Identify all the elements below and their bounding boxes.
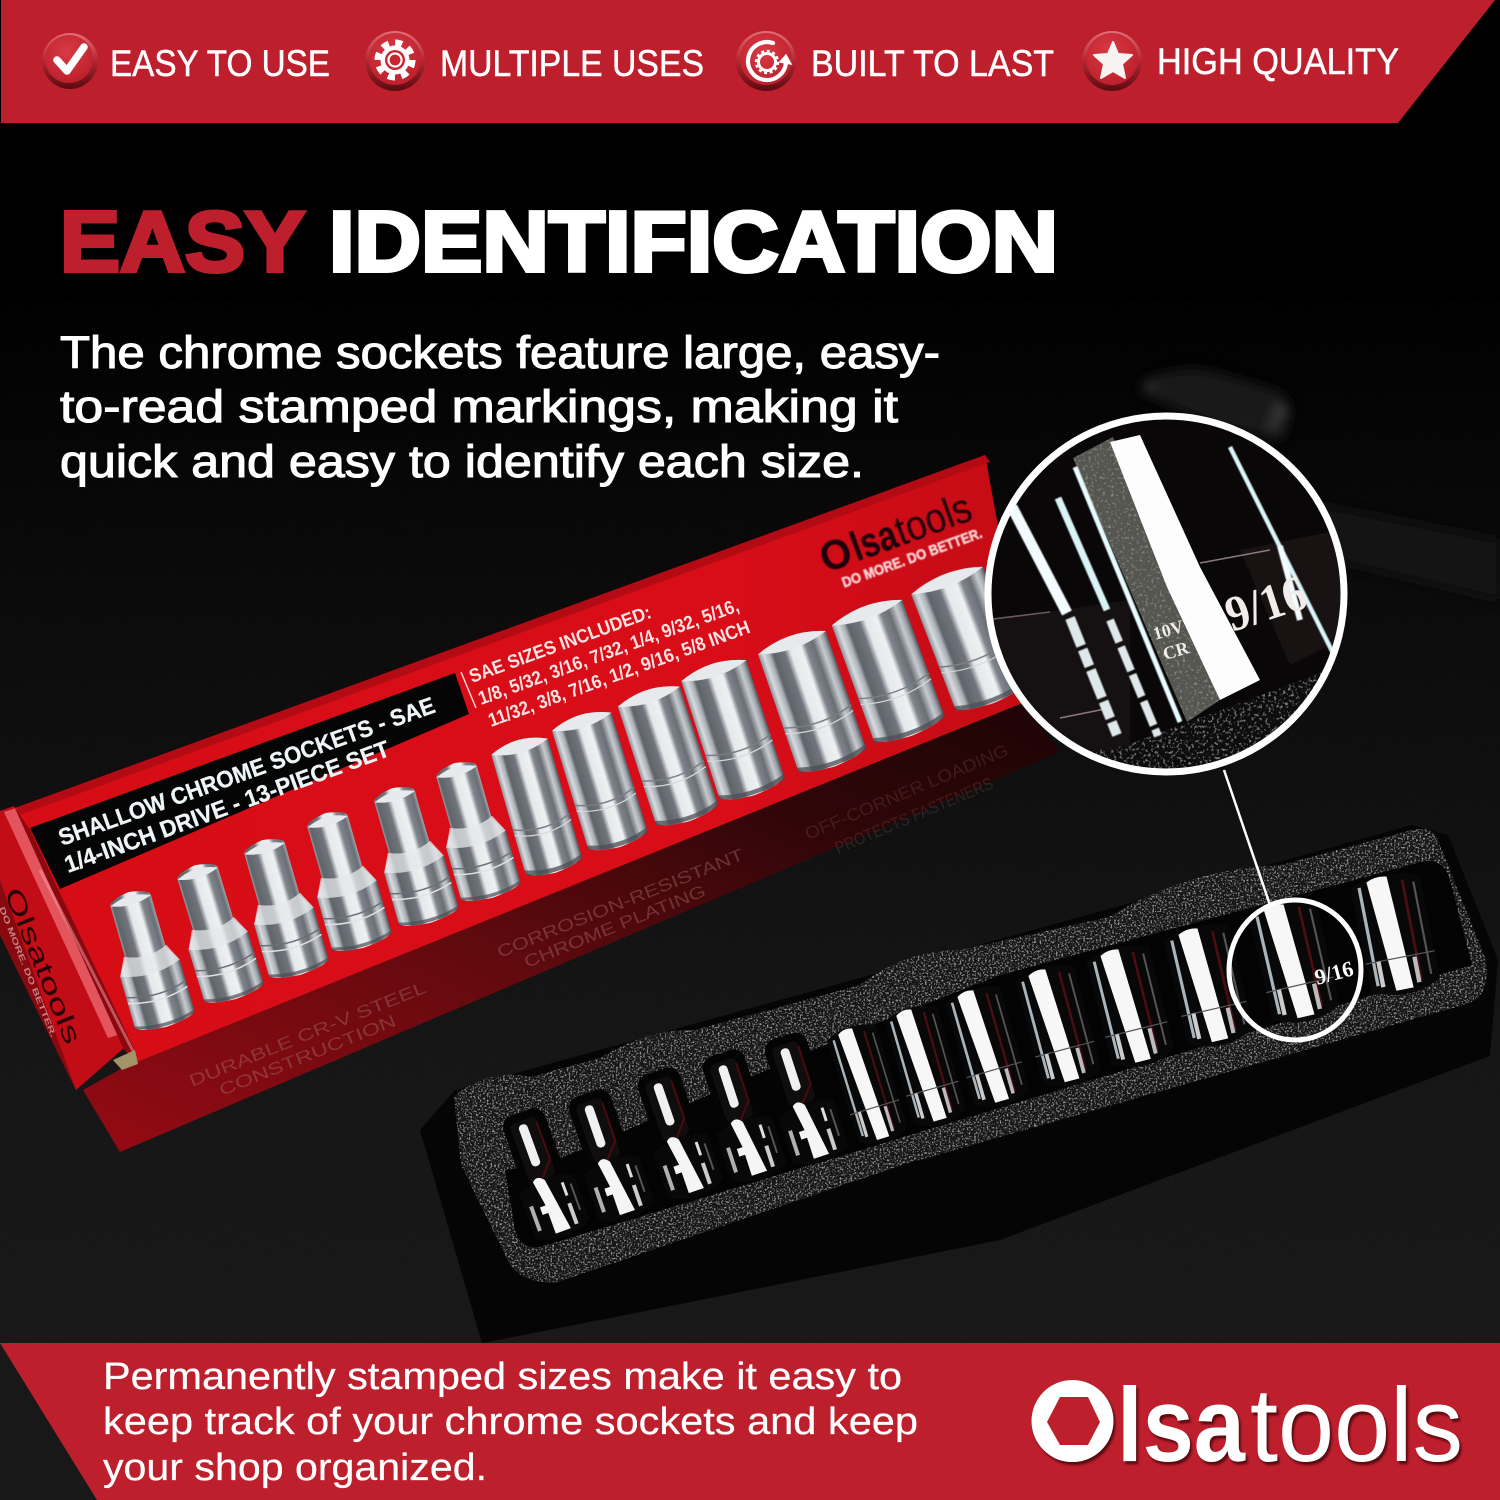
title: EASY bbox=[60, 195, 305, 290]
black foam tray holding chrome sockets bbox=[420, 825, 1498, 1343]
logo: Olsatools: lsa bbox=[1117, 1367, 1246, 1484]
magnified stamped size marks: 9/16 bbox=[1218, 564, 1313, 642]
logo: Olsatools bbox=[1032, 1360, 1463, 1485]
icon: star badge bbox=[1082, 31, 1142, 91]
box lower face captions: CORROSION-RESISTANT bbox=[494, 845, 746, 962]
logo: Olsatools: O bbox=[1032, 1360, 1113, 1485]
sae sizes list on box: SAE SIZES INCLUDED: bbox=[467, 602, 654, 688]
intro text block: quick and easy to identify each size. bbox=[60, 436, 864, 487]
callout: magnified socket with 9/16 stamp: 10V bbox=[1151, 616, 1186, 644]
feature: multiple uses bbox=[365, 31, 704, 91]
intro text block: to-read stamped markings, making it bbox=[60, 381, 899, 432]
magnified socket body bbox=[1073, 437, 1220, 722]
footer text block: your shop organized. bbox=[103, 1447, 487, 1489]
box lower face captions: CHROME PLATING bbox=[521, 881, 708, 972]
black title strip on box: SHALLOW CHROME SOCKETS - SAE bbox=[55, 692, 438, 851]
title: IDENTIFICATION bbox=[329, 195, 1058, 290]
tray outer wall bbox=[420, 825, 1498, 1343]
feature: high quality bbox=[1082, 31, 1399, 91]
feature: built to last bbox=[736, 31, 1054, 91]
box lower face captions: OFF-CORNER LOADING bbox=[802, 741, 1011, 844]
magnified tray surface bbox=[1091, 672, 1322, 768]
feature: built to last: BUILT TO LAST bbox=[811, 43, 1054, 84]
logo on box: O bbox=[813, 527, 858, 581]
box lower face captions: DURABLE CR-V STEEL bbox=[186, 978, 429, 1091]
icon: gear with circular arrow badge bbox=[736, 31, 796, 91]
feature: easy to use: EASY TO USE bbox=[110, 43, 330, 84]
callout: magnified socket with 9/16 stamp: CR bbox=[1161, 637, 1192, 664]
box side flap bbox=[0, 806, 138, 1090]
sockets pictured on box bbox=[98, 560, 1030, 1035]
box lower face bbox=[83, 700, 1060, 1152]
box lower face captions: PROTECTS FASTENERS bbox=[832, 774, 996, 858]
callout: magnified socket with 9/16 stamp bbox=[980, 410, 1350, 800]
logo: Olsatools: tools bbox=[1250, 1367, 1463, 1484]
sae sizes list on box: 11/32, 3/8, 7/16, 1/2, 9/16, 5/8 INCH bbox=[486, 617, 753, 732]
tray sockets row bbox=[493, 868, 1442, 1246]
footer text block: keep track of your chrome sockets and keep bbox=[103, 1401, 918, 1443]
tray sockets row: 9/16 bbox=[1312, 956, 1356, 990]
callout: connector line bbox=[1224, 770, 1270, 905]
callout: highlight ring on tray socket bbox=[1229, 900, 1361, 1040]
footer text block bbox=[103, 1356, 918, 1489]
box side flap: Olsatools bbox=[0, 884, 87, 1048]
logo on box: DO MORE. DO BETTER. bbox=[840, 525, 985, 591]
intro text block bbox=[60, 327, 940, 487]
box front panel bbox=[15, 455, 1030, 1062]
tray cavity bbox=[505, 861, 1472, 1247]
intro text block: The chrome sockets feature large, easy- bbox=[60, 327, 940, 378]
logo on box: tools bbox=[888, 483, 978, 554]
box lower face captions bbox=[186, 741, 1011, 1100]
tray textured rim bbox=[454, 829, 1487, 1282]
feature: easy to use bbox=[42, 33, 330, 89]
title bbox=[60, 195, 1058, 290]
logo on box: lsa bbox=[844, 510, 904, 570]
box lower face captions: CONSTRUCTION bbox=[216, 1011, 399, 1100]
top red banner bbox=[1, 0, 1495, 123]
bottom red banner bbox=[0, 1343, 1500, 1500]
footer text block: Permanently stamped sizes make it easy to bbox=[103, 1356, 902, 1398]
icon: checkmark badge bbox=[42, 33, 98, 89]
feature: multiple uses: MULTIPLE USES bbox=[440, 43, 704, 84]
icon: gear badge bbox=[365, 31, 425, 91]
product box: red socket set packaging bbox=[0, 455, 1060, 1152]
black title strip on box: 1/4-INCH DRIVE - 13-PIECE SET bbox=[61, 735, 394, 878]
sae sizes list on box: 1/8, 5/32, 3/16, 7/32, 1/4, 9/32, 5/16, bbox=[476, 596, 742, 710]
logo on box bbox=[813, 483, 985, 596]
feature: high quality: HIGH QUALITY bbox=[1157, 41, 1399, 82]
